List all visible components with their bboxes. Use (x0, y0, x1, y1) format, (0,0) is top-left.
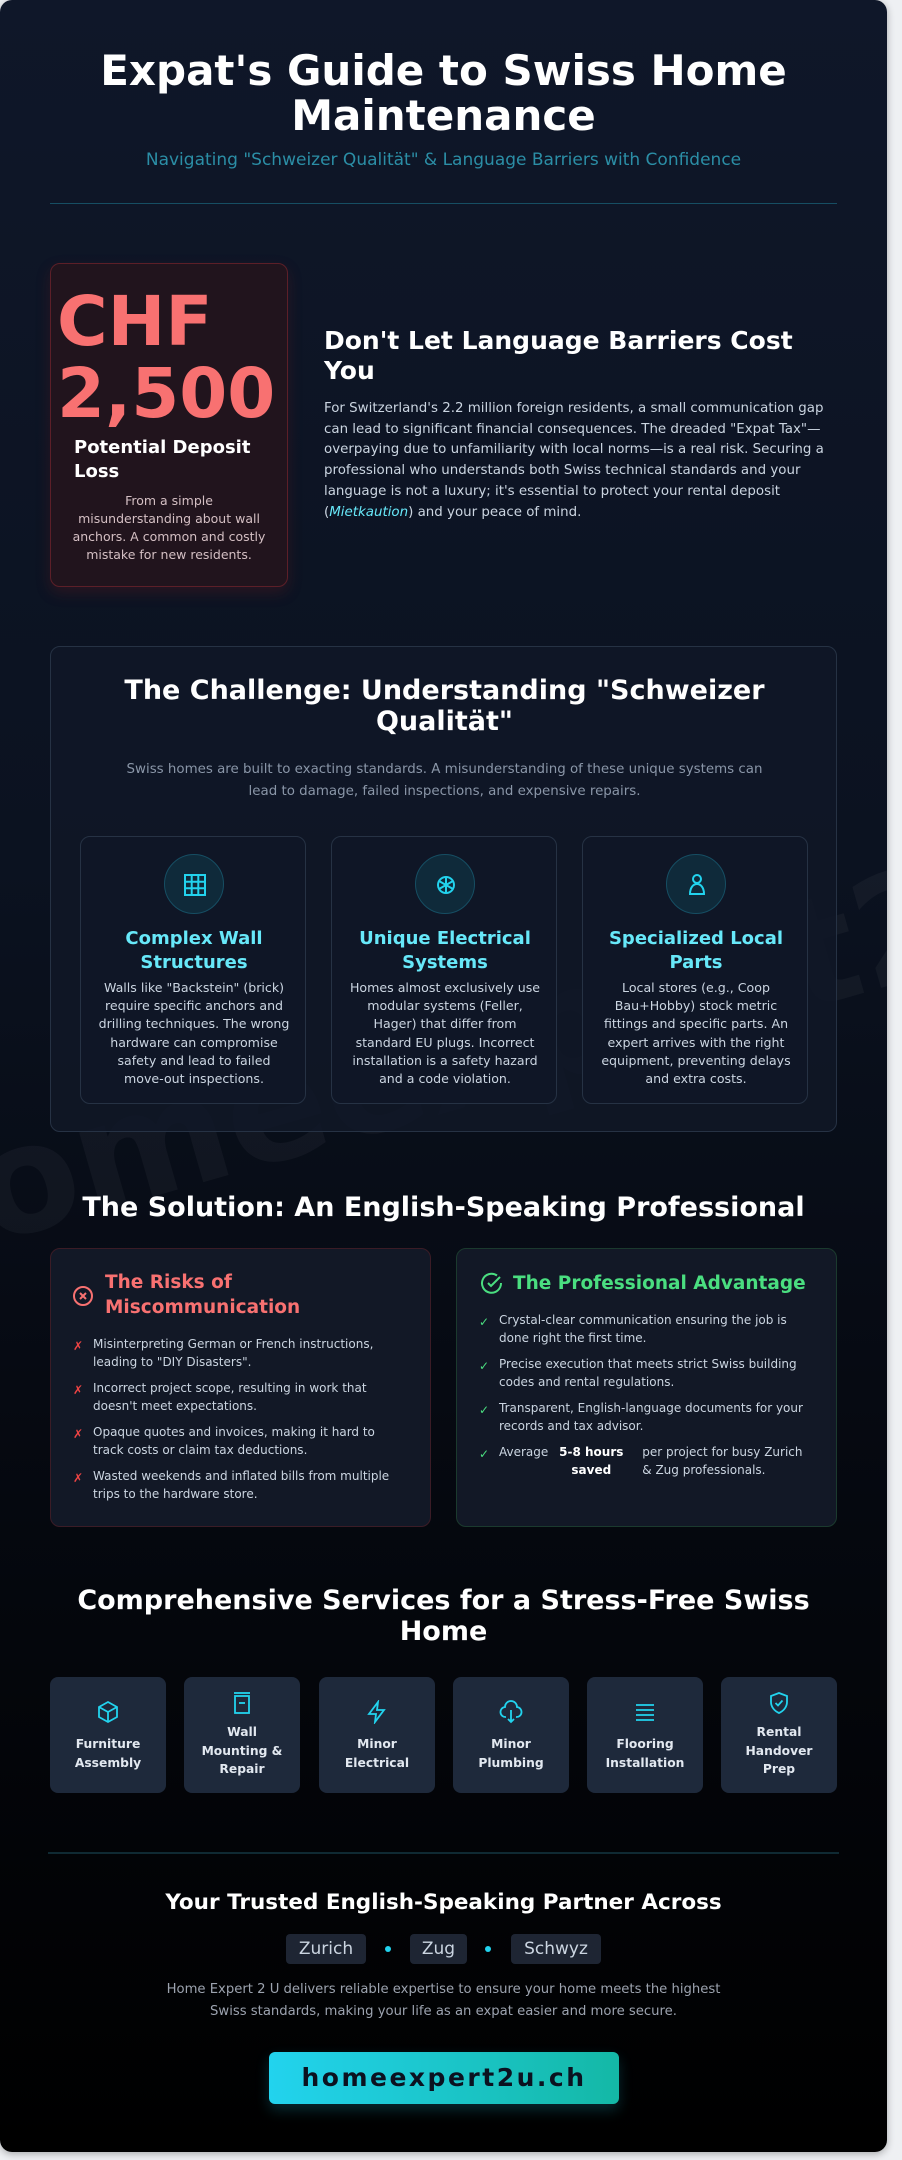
tile: wall mounting (184, 1677, 300, 1793)
location pills: Zug (422, 1939, 455, 1959)
card text: Local stores (e.g., Coop Bau+Hobby) stock metric fittings and specific parts. An expert arrives with the right equipment, preventing delays and extra costs. (601, 980, 791, 1086)
paragraph: expat tax: For Switzerland's 2.2 million foreign residents, a small communication gap can lead to significant financial consequences. The dreaded "Expat Tax"—overpaying due to unfamiliarity with local norms—is a real risk. Securing a professional who understands both Swiss technical standards and your language is not a luxury; it's essential to protect your rental deposit (Mietkaution) and your peace of mind. (324, 401, 824, 520)
tile: handover: Rental Handover Prep (745, 1725, 812, 1776)
card title: Specialized Local Parts (609, 928, 783, 973)
location pills: Schwyz (524, 1939, 588, 1959)
tile: plumbing (453, 1677, 569, 1793)
stat card: deposit loss (50, 263, 288, 587)
advantage heading: The Professional Advantage (513, 1273, 806, 1294)
cta button: homeexpert2u.ch (302, 2063, 586, 2092)
tile: electrical (319, 1677, 435, 1793)
advantage list: Crystal-clear communication ensuring the job is done right the first time. (499, 1313, 787, 1345)
subtitle: Navigating "Schweizer Qualität" & Language Barriers with Confidence (146, 150, 741, 170)
card title: Complex Wall Structures (125, 928, 263, 973)
advantage list: ✓ (479, 1403, 489, 1417)
panel: risks (50, 1248, 431, 1527)
advantage list (479, 1313, 803, 1477)
heading: services: Comprehensive Services for a Stress-Free Swiss Home (77, 1585, 810, 1647)
advantage list: per project for busy Zurich & Zug professionals. (642, 1445, 802, 1477)
icon: grid wall (164, 854, 224, 914)
heading: solution: The Solution: An English-Speaking Professional (82, 1192, 805, 1223)
heading: language barriers: Don't Let Language Barriers Cost You (324, 326, 793, 385)
advantage list: ✓ (479, 1359, 489, 1373)
tile: plumbing: Minor Plumbing (478, 1737, 544, 1770)
risks list: ✗ (73, 1471, 83, 1485)
stat number (57, 282, 275, 434)
title: Expat's Guide to Swiss Home Maintenance (100, 46, 787, 140)
panel: challenge (50, 646, 837, 1132)
card text: Walls like "Backstein" (brick) require specific anchors and drilling techniques. The wrong hardware can compromise safety and lead to failed move-out inspections. (99, 980, 289, 1086)
tile: wall mounting: Wall Mounting & Repair (202, 1725, 282, 1776)
advantage list: 5-8 hours saved (559, 1445, 623, 1477)
services grid (50, 1677, 837, 1793)
icon: person (666, 854, 726, 914)
stat number: CHF (57, 282, 213, 362)
stat number: 2,500 (57, 354, 275, 434)
challenge intro: Swiss homes are built to exacting standards. A misunderstanding of these unique systems can lead to damage, failed inspections, and expensive repairs. (127, 762, 762, 799)
stat note: From a simple misunderstanding about wall anchors. A common and costly mistake for new residents. (73, 493, 265, 562)
icon: x circle (73, 1286, 93, 1306)
advantage list: Precise execution that meets strict Swiss building codes and rental regulations. (499, 1357, 797, 1389)
card: local parts (582, 836, 808, 1104)
panel: advantage (456, 1248, 837, 1527)
tile: electrical: Minor Electrical (345, 1737, 409, 1770)
challenge heading: The Challenge: Understanding "Schweizer Qualität" (124, 675, 765, 737)
stat label: Potential Deposit Loss (74, 437, 250, 482)
risks heading: The Risks of Miscommunication (105, 1272, 300, 1318)
risks list: Incorrect project scope, resulting in work that doesn't meet expectations. (93, 1381, 367, 1413)
risks list: Wasted weekends and inflated bills from multiple trips to the hardware store. (93, 1469, 389, 1501)
risks list: ✗ (73, 1427, 83, 1441)
risks list: Opaque quotes and invoices, making it hard to track costs or claim tax deductions. (93, 1425, 375, 1457)
location pills: Zurich (299, 1939, 353, 1959)
tile: flooring: Flooring Installation (606, 1737, 684, 1770)
risks list: ✗ (73, 1383, 83, 1397)
advantage list: ✓ (479, 1315, 489, 1329)
icon: check circle (480, 1272, 502, 1294)
tile: flooring (587, 1677, 703, 1793)
advantage list: ✓ (479, 1447, 489, 1461)
header divider (50, 203, 837, 204)
risks list: Misinterpreting German or French instructions, leading to "DIY Disasters". (93, 1337, 373, 1369)
footer divider (48, 1852, 839, 1854)
card title: Unique Electrical Systems (359, 928, 531, 973)
advantage list: Transparent, English-language documents for your records and tax advisor. (499, 1401, 803, 1433)
risks list: ✗ (73, 1339, 83, 1353)
tile: furniture (50, 1677, 166, 1793)
risks list (73, 1337, 389, 1501)
location pills (286, 1934, 601, 1964)
footer heading: Your Trusted English-Speaking Partner Across (165, 1890, 722, 1915)
tile: handover (721, 1677, 837, 1793)
card: electrical (331, 836, 557, 1104)
card: wall structures (80, 836, 306, 1104)
icon: socket (415, 854, 475, 914)
cta button (269, 2052, 619, 2104)
advantage list: Average (499, 1445, 548, 1459)
tile: furniture: Furniture Assembly (75, 1737, 141, 1770)
footer text: Home Expert 2 U delivers reliable expertise to ensure your home meets the highest Swiss standards, making your life as an expat easier and more secure. (167, 1982, 720, 2019)
card text: Homes almost exclusively use modular systems (Feller, Hager) that differ from standard EU plugs. Incorrect installation is a safety hazard and a code violation. (350, 980, 540, 1086)
